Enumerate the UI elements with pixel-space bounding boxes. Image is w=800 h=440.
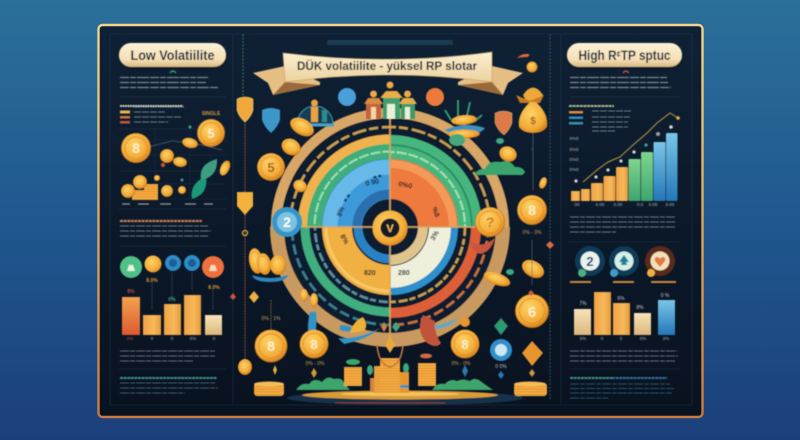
percent labels lower: 0% - 0% [452,361,471,367]
bar chart: right: 0 [620,336,623,341]
icon: chevron [170,71,176,73]
growth bar chart: 0%0 [569,136,579,141]
icon: orange shield [495,111,512,135]
growth bar chart: 0.00 [614,202,623,207]
wheel band labels [336,178,441,277]
icon: ring [242,230,248,236]
body text [120,351,216,361]
coin 6 [515,294,549,328]
coin 5: 5 [267,160,275,175]
bar chart: right [574,292,675,341]
percent label right: 0% - 0% [523,230,542,236]
coin 8 lower right [450,330,480,358]
bar chart: left: 0 [213,336,216,341]
bar chart: left [122,273,222,341]
arch on pedestal [377,345,403,367]
wheel band labels: 8% [336,205,347,218]
central coin towers [344,358,436,393]
bar chart: right: 0% [640,336,646,341]
banner title: DÜK volatiilite - yüksel RP slotar [297,58,477,73]
body text [570,217,676,232]
icon row [120,255,224,278]
red marker and right line [230,34,554,400]
gold coin right [475,207,505,237]
bar chart: left: 8% [127,289,135,295]
loose coins left [278,114,317,195]
wheel quadrant: top left [270,107,390,228]
icon: yellow shield low [237,192,253,215]
coin 8 lower left: 8 [310,337,318,352]
icon: chevron [623,71,629,73]
bar chart: right: 0 % [661,293,670,299]
wheel band labels: 3% [430,229,441,242]
percent labels lower [262,316,471,367]
growth bar chart: 0%0 [569,157,579,162]
coin 8 lower right: 8 [461,337,469,352]
banner [253,40,523,95]
coin 2: 2 [283,214,291,230]
bar chart: left: 0% [127,336,133,341]
percent labels lower: 0% - 1% [262,316,281,322]
coin chart illustration: 5 [207,126,215,141]
icon: orange token [426,88,444,106]
icon: blue shield [262,108,280,133]
bar chart: right: 8% [636,305,644,311]
section text [120,220,202,222]
growth bar chart: 0.00 [666,202,675,207]
icon: small coin and leaf [517,54,538,72]
growth bar chart: 0.00 [596,202,605,207]
center v coin [372,210,408,246]
coin 2 [272,207,302,237]
coin 8 lower far left: 8 [267,338,275,354]
coin chart illustration: 8 [132,140,140,156]
bar chart: left: 0% [168,297,176,303]
body text [570,351,678,361]
bar chart: left: 0% [190,336,196,341]
bar chart: right: 0% [580,336,586,341]
small coin [538,176,548,190]
growth bar chart [569,113,680,207]
coin 6: 6 [528,304,536,321]
decorations on wheel [230,34,554,405]
coin 8 right: 8 [528,202,536,218]
bar chart: left: 0 [151,336,154,341]
icon: money bag [516,88,547,133]
legend: SINGLE [202,111,221,117]
icon: hanging coin [238,359,252,375]
coin 5 [257,153,285,181]
wheel quadrant: top right [390,108,510,228]
base platform [287,390,523,405]
percent labels lower: 0% - 0% [306,361,325,367]
wheel band labels: %8 [430,206,440,218]
frame panel [98,25,702,417]
swoosh coins bottom right [420,238,514,346]
tilted coin right [519,256,547,282]
title pill: low volatility [119,43,226,67]
bar chart: left: 8.0% [146,278,158,284]
bar chart: right: 6% [617,296,625,302]
bar chart: right: 2% [663,336,669,341]
flat coin stacks [254,382,547,396]
blue section text [570,378,674,398]
icon row: circles [570,246,676,282]
bar chart: left: 8.0% [208,285,220,291]
center v coin: V [386,223,394,235]
bar chart: right: 7% [579,301,587,307]
intro text lines [120,78,218,88]
right panel [567,43,682,398]
green ornaments [475,138,525,175]
blue token with percent: 0 0% [495,364,507,370]
coin 8 right [517,195,547,225]
icon row: circles: 2 [586,254,594,269]
title pill: low volatility: Low Volatiilite [130,47,215,63]
icon: money bag: $ [530,116,536,127]
legend [120,106,221,124]
growth bar chart: 00 [574,202,580,207]
coin 8 lower left [300,330,328,358]
coin pile left with dish [247,247,288,282]
growth bar chart: 0.0 [637,202,644,207]
houses [364,82,417,119]
growth bar chart: 0%0 [569,167,579,172]
swoosh coins bottom left [300,289,380,344]
green section text [120,378,218,393]
wheel band labels: 8% [338,234,350,246]
gold coin right: ? [486,214,494,230]
coin stack with wing [445,100,485,146]
wheel band labels: 280 [398,270,410,277]
ribbon tails [253,66,523,95]
icon: yellow shield [237,97,253,122]
central wheel [270,107,510,347]
wheel quadrant: bottom left [269,226,390,348]
title pill: high rtp: High RᵋTP sptuc [578,47,671,63]
wheel axis lines [305,118,475,345]
intro text lines [570,78,671,88]
wheel band labels: 820 [364,270,376,277]
icon: dome with figure [296,100,334,126]
green bushes [296,354,493,390]
left panel [119,43,232,393]
wheel quadrant: bottom right [390,226,511,348]
diamonds [249,290,543,379]
legend [569,106,632,131]
coin chart illustration [121,119,232,204]
pendant column left [237,34,253,375]
growth bar chart: 0.00 [649,202,658,207]
bar chart: left: 0 [171,336,174,341]
blue token with percent [490,339,512,370]
wheel band labels: 0%0 [398,181,413,190]
title pill: high rtp [567,43,682,67]
wheel band labels: 0 90 [365,178,380,188]
icon: blue token [338,88,356,106]
ribbon [283,52,492,82]
coin 8 lower far left [254,330,288,362]
bar chart: right: 0 [601,336,604,341]
growth bar chart: 0%0 [569,147,579,152]
